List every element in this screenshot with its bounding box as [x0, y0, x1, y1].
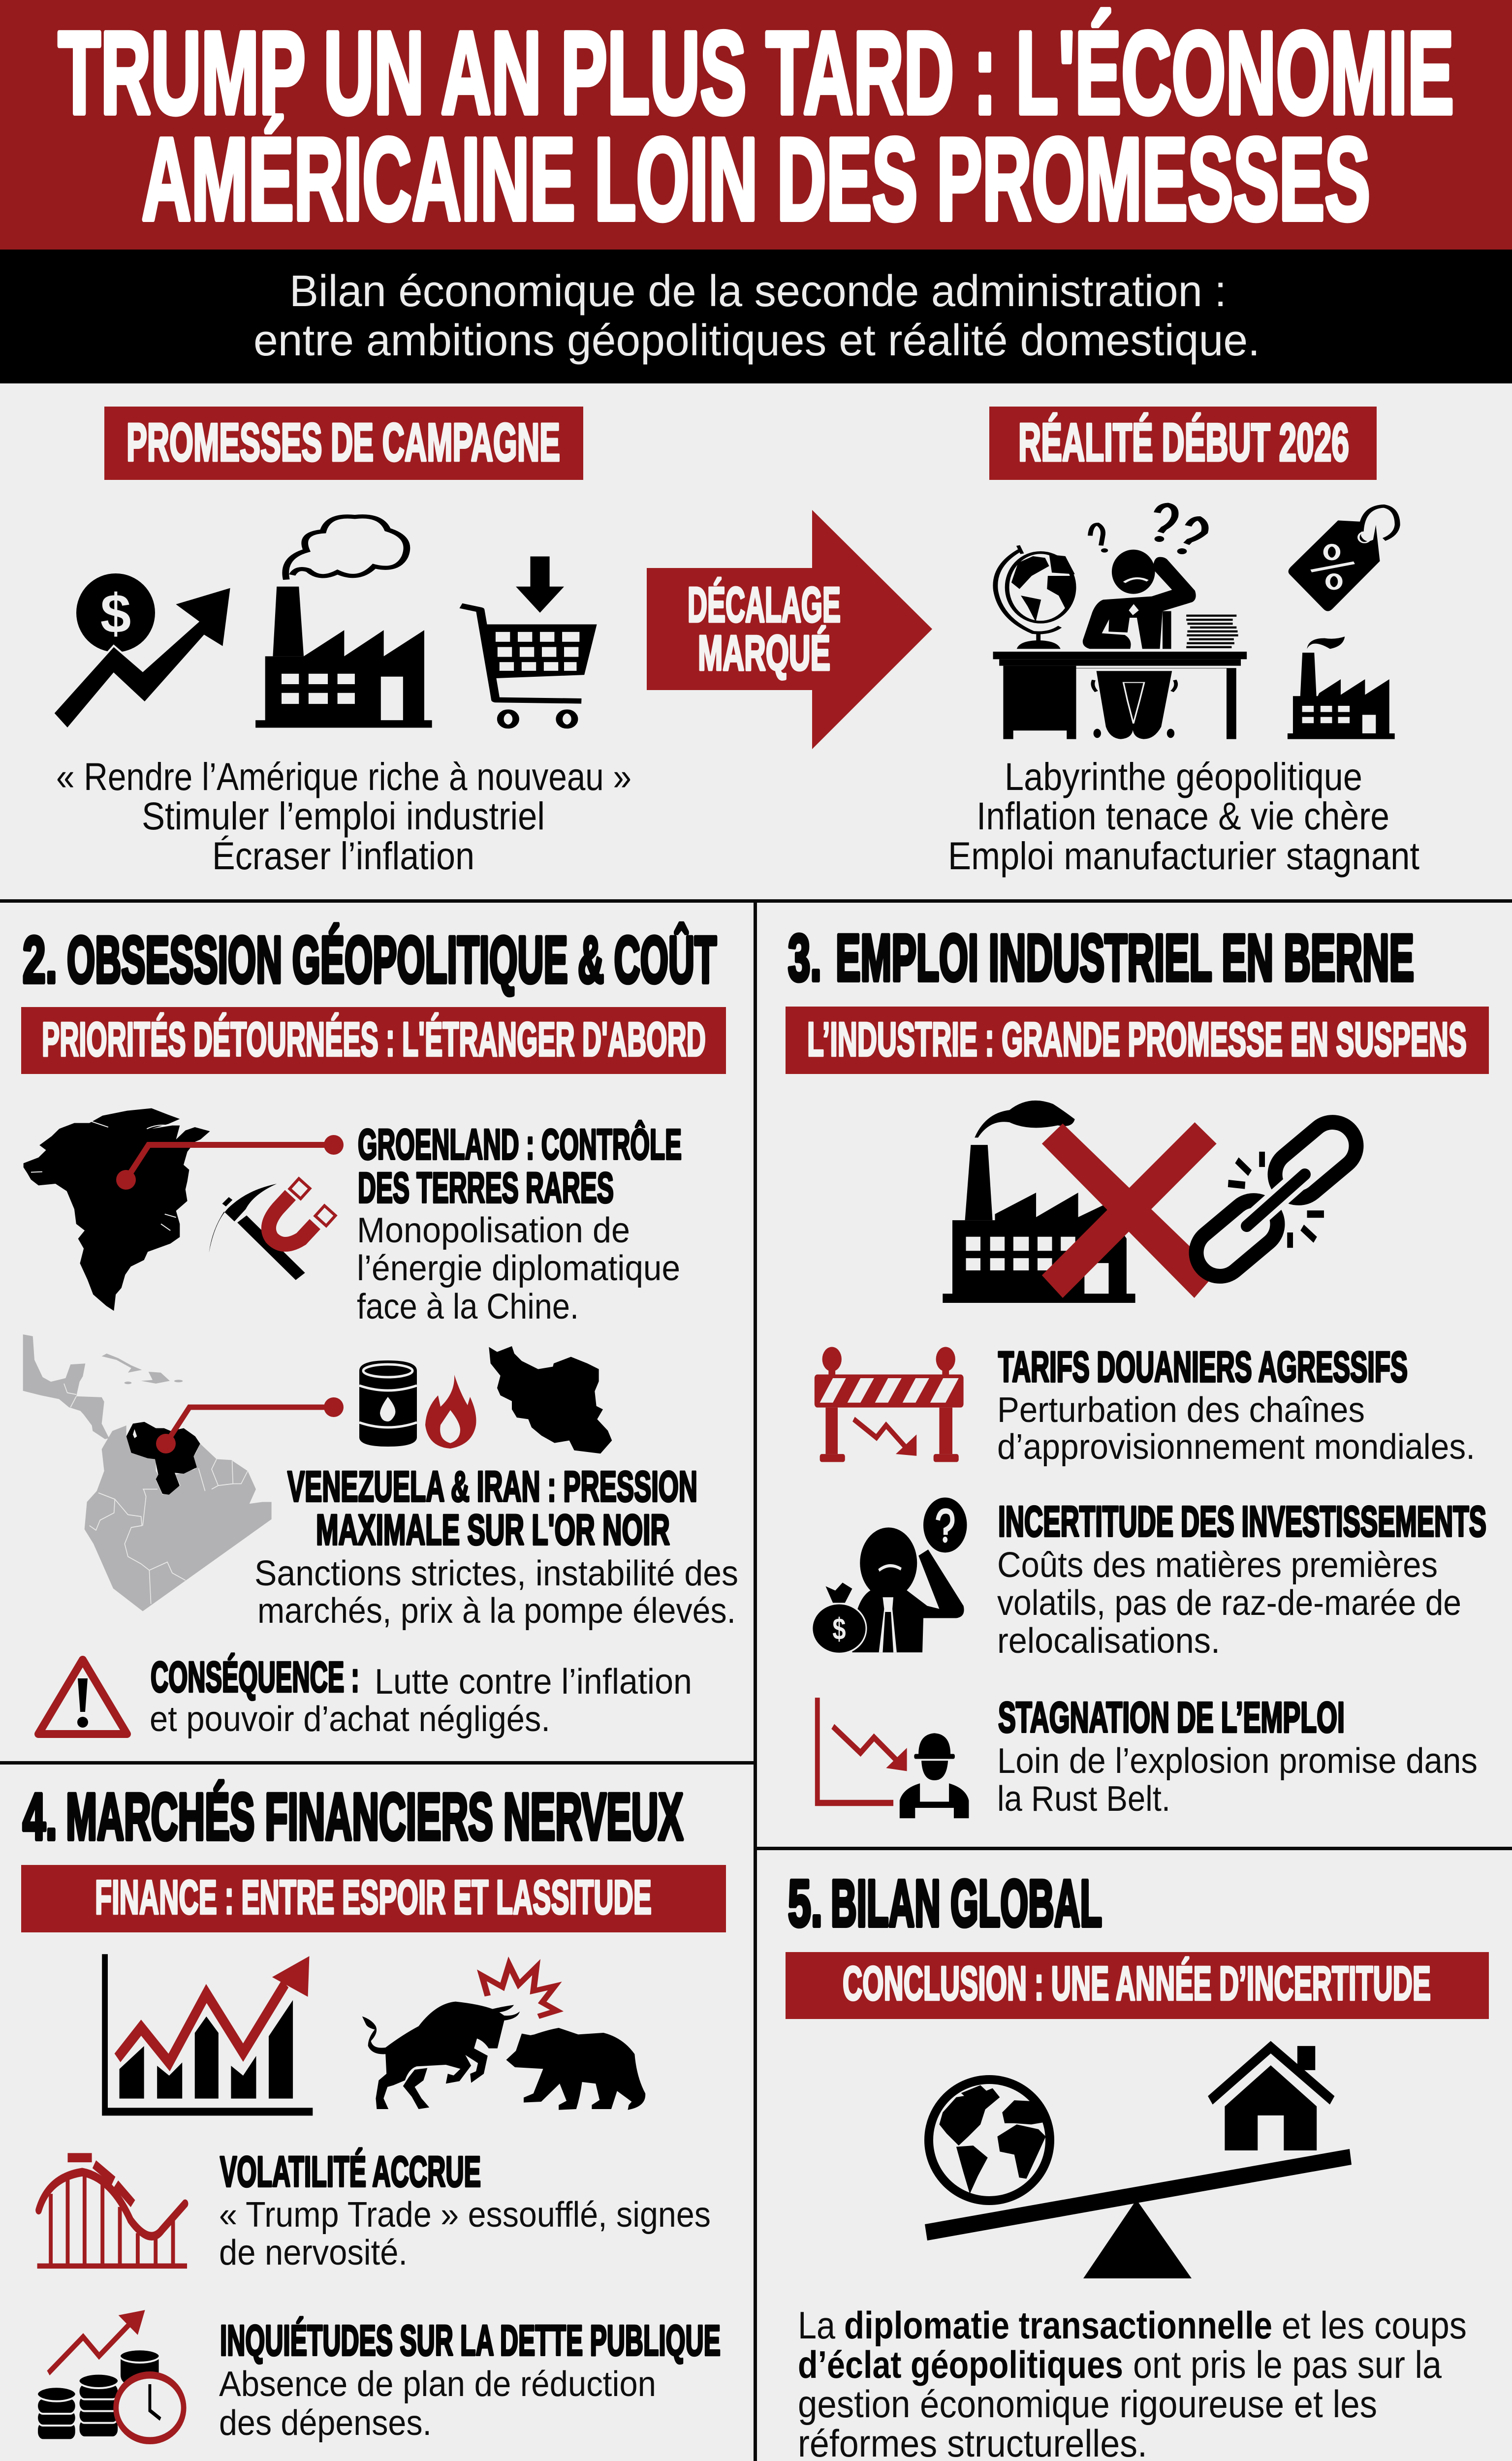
- text: volatility: de nervosité.: [219, 2233, 408, 2272]
- text: Greenland: l’énergie diplomatique: [357, 1249, 680, 1288]
- text: tariffs: d’approvisionnement mondiales.: [997, 1427, 1475, 1467]
- text: volatility: VOLATILITÉ ACCRUE: [220, 2148, 481, 2196]
- icon: magnet: [269, 1179, 336, 1244]
- subtitle band: entre ambitions géopolitiques et réalité domestique.: [253, 316, 1260, 365]
- icon: dollar with rising arrow: $: [100, 583, 131, 644]
- text: Venezuela and Iran: MAXIMALE SUR L'OR NOIR: [316, 1506, 670, 1554]
- text: investment uncertainty: volatils, pas de raz-de-marée de: [997, 1583, 1461, 1623]
- callout: Greenland pointer: [116, 1135, 344, 1190]
- text: reality list: Emploi manufacturier stagnant: [948, 834, 1419, 878]
- banner: PRIORITÉS DÉTOURNÉES : L'ÉTRANGER D'ABORD: [42, 1012, 706, 1066]
- heading: BILAN GLOBAL: [831, 1867, 1102, 1940]
- text: conclusion: gestion économique rigoureuse et les: [798, 2382, 1377, 2426]
- heading: 4.: [23, 1780, 57, 1854]
- map: Iran: [489, 1346, 612, 1453]
- panel 4: nervous financial markets: [21, 1780, 730, 2461]
- icon: falling chart and worker: [818, 1698, 969, 1818]
- text: public debt: INQUIÉTUDES SUR LA DETTE PUBLIQUE: [220, 2317, 721, 2365]
- heading: [23, 1780, 683, 1854]
- subtitle band: [0, 250, 1512, 383]
- heading: [23, 923, 717, 997]
- text: consequence: et pouvoir d’achat négligés.: [150, 1700, 550, 1739]
- icon: worried investor with money bag: [812, 1497, 967, 1654]
- icon: small factory: [1288, 636, 1395, 739]
- text: reality list: [948, 755, 1419, 878]
- icon: flame: [425, 1375, 476, 1449]
- header band: title: [0, 0, 1512, 250]
- text: conclusion: et les coups: [1282, 2303, 1467, 2347]
- banner: [21, 1865, 726, 1932]
- icon: road barrier: [815, 1347, 964, 1462]
- panel 1: promises versus reality: [53, 407, 1419, 878]
- text: conclusion: [798, 2303, 1493, 2461]
- text: employment stagnation: la Rust Belt.: [997, 1779, 1170, 1819]
- text: public debt: des dépenses.: [219, 2403, 432, 2443]
- heading: 3.: [788, 921, 821, 995]
- text: Greenland: Monopolisation de: [357, 1211, 630, 1250]
- text: promises list: « Rendre l’Amérique riche à nouveau »: [56, 755, 631, 798]
- text: promises list: Stimuler l’emploi industriel: [142, 794, 545, 838]
- icon: house: [1210, 2046, 1332, 2150]
- icon: percent price tag: [1289, 506, 1397, 611]
- tag: campaign promises: [104, 407, 583, 480]
- panel 2: geopolitical obsession: [21, 923, 738, 1739]
- subtitle band: Bilan économique de la seconde administration :: [289, 267, 1227, 316]
- text: Venezuela and Iran: marchés, prix à la pompe élevés.: [257, 1591, 736, 1631]
- callout: Venezuela pointer: [156, 1397, 344, 1453]
- text: volatility: « Trump Trade » essoufflé, signes: [219, 2195, 711, 2235]
- icon: pickaxe: [209, 1184, 300, 1276]
- text: employment stagnation: Loin de l’explosion promise dans: [997, 1741, 1478, 1781]
- arrow: marked gap: DÉCALAGE: [688, 577, 841, 632]
- text: Greenland: DES TERRES RARES: [358, 1164, 614, 1212]
- icon: crossed factory: [943, 1101, 1217, 1303]
- icon: question marks: [1090, 505, 1205, 554]
- text: employment stagnation: [997, 1694, 1478, 1819]
- icon: globe: [929, 2080, 1050, 2201]
- text: consequence: Lutte contre l’inflation: [375, 1662, 692, 1702]
- text: conclusion: d’éclat géopolitiques: [798, 2343, 1123, 2386]
- heading: 5.: [788, 1867, 822, 1940]
- text: Greenland: GROENLAND : CONTRÔLE: [358, 1121, 682, 1168]
- text: investment uncertainty: relocalisations.: [997, 1621, 1220, 1661]
- text: conclusion: ont pris le pas sur la: [1133, 2343, 1442, 2386]
- icon: warning triangle: [38, 1660, 127, 1734]
- heading: OBSESSION GÉOPOLITIQUE & COÛT: [67, 923, 717, 997]
- panel 3: industrial employment: [786, 921, 1489, 1819]
- icon: coins, clock and rising arrow: [37, 2310, 184, 2441]
- icon: dollar with rising arrow: [53, 573, 231, 729]
- map: Greenland: [24, 1108, 210, 1311]
- text: investment uncertainty: [997, 1498, 1486, 1661]
- heading: MARCHÉS FINANCIERS NERVEUX: [66, 1780, 683, 1854]
- text: reality list: Inflation tenace & vie chère: [976, 794, 1389, 838]
- text: Greenland: [357, 1121, 682, 1326]
- icon: worried investor with money bag: $: [832, 1611, 846, 1646]
- text: public debt: [219, 2317, 721, 2443]
- text: conclusion: diplomatie transactionnelle: [844, 2303, 1272, 2347]
- arrow: marked gap: MARQUÉ: [698, 626, 830, 681]
- arrow: marked gap: [647, 510, 932, 749]
- icon: shopping cart with down arrow: [461, 556, 597, 726]
- icon: seesaw: [925, 2149, 1352, 2278]
- heading: [788, 1867, 1102, 1940]
- text: conclusion: La: [798, 2303, 836, 2347]
- banner: FINANCE : ENTRE ESPOIR ET LASSITUDE: [95, 1870, 652, 1924]
- tag: reality early 2026: [989, 407, 1377, 480]
- icon: factory with smoke: [255, 516, 432, 728]
- text: consequence: [150, 1653, 692, 1739]
- heading: 2.: [23, 923, 57, 997]
- text: Venezuela and Iran: Sanctions strictes, instabilité des: [254, 1554, 738, 1593]
- text: promises list: [56, 755, 631, 878]
- text: promises list: Écraser l’inflation: [212, 834, 474, 878]
- banner: [21, 1007, 726, 1074]
- panel 5: overall assessment: [786, 1867, 1493, 2461]
- icon: confused man at desk with globe: [993, 545, 1247, 739]
- text: tariffs: Perturbation des chaînes: [997, 1390, 1365, 1430]
- icon: broken chain: [1187, 1112, 1366, 1286]
- text: public debt: Absence de plan de réduction: [219, 2365, 656, 2404]
- text: Greenland: face à la Chine.: [357, 1287, 579, 1326]
- chart icon: rising market: [105, 1954, 313, 2112]
- text: Venezuela and Iran: [254, 1463, 738, 1631]
- icon: oil barrel: [359, 1360, 417, 1447]
- text: tariffs: [997, 1343, 1475, 1467]
- text: investment uncertainty: Coûts des matières premières: [997, 1546, 1438, 1585]
- text: Venezuela and Iran: VENEZUELA & IRAN : PRESSION: [287, 1463, 697, 1511]
- tag: campaign promises: PROMESSES DE CAMPAGNE: [126, 412, 560, 473]
- text: consequence: CONSÉQUENCE :: [151, 1653, 359, 1701]
- map: Central and South America with Venezuela: [23, 1334, 272, 1611]
- text: reality list: Labyrinthe géopolitique: [1005, 755, 1362, 798]
- icon: bull and bear: [362, 1965, 645, 2110]
- icon: roller coaster: [37, 2158, 187, 2266]
- text: volatility: [219, 2148, 711, 2272]
